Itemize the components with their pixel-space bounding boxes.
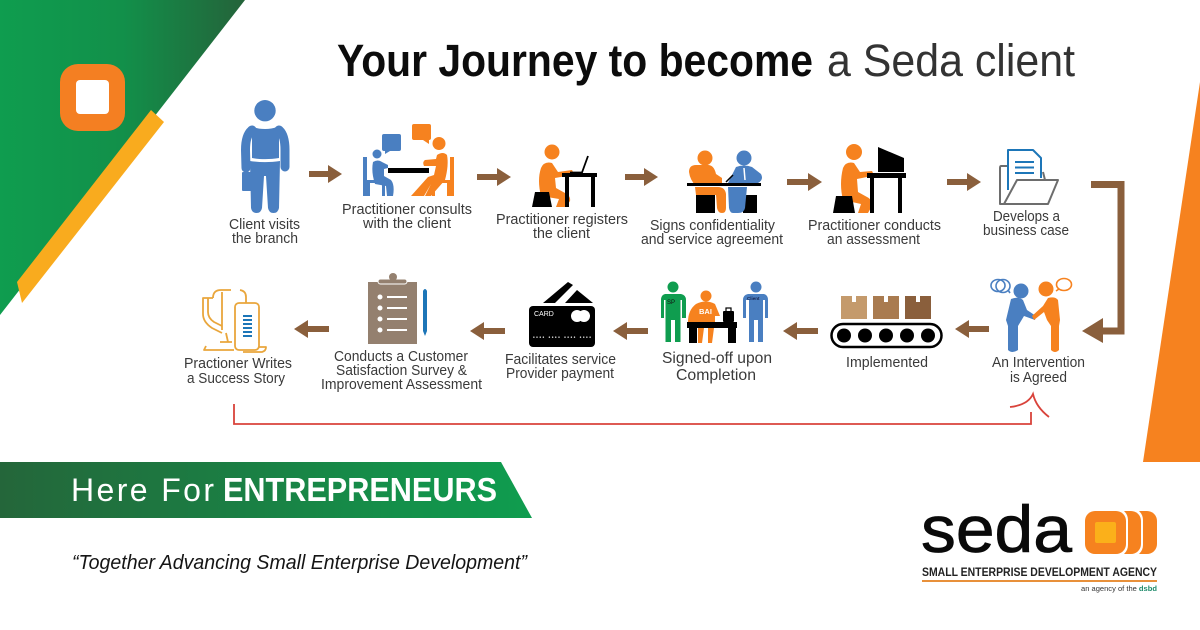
- icon: consultation: [363, 124, 454, 196]
- step: practitioner consults: [342, 124, 472, 232]
- arrow: [787, 173, 822, 191]
- arrow: [294, 320, 329, 338]
- icon: SP, BAI and client sign-off: BAI: [699, 307, 712, 316]
- label: with the client: [362, 216, 451, 232]
- arrow: [470, 322, 505, 340]
- icon: practitioner at computer: [833, 144, 906, 213]
- label: [662, 350, 772, 384]
- label: the branch: [232, 231, 298, 247]
- label: Facilitates service: [505, 352, 616, 368]
- wordmark: seda: [921, 492, 1072, 566]
- green corner triangle: [0, 0, 245, 315]
- title: a Seda client: [827, 35, 1075, 86]
- label: Signed-off upon: [662, 350, 772, 367]
- orange right triangle: [1143, 82, 1200, 462]
- label: Conducts a Customer: [334, 349, 468, 365]
- icon: credit card: CARD: [534, 311, 554, 318]
- label: an assessment: [827, 232, 920, 248]
- icon: handshake: [991, 278, 1072, 352]
- label: Client visits: [229, 217, 300, 233]
- icon: orange seda square: [60, 64, 125, 131]
- banner: here for entrepreneurs: ENTREPRENEURS: [223, 471, 497, 508]
- arrow: connector to second row: [1082, 181, 1124, 343]
- label: is Agreed: [1010, 370, 1067, 386]
- label: An Intervention: [992, 355, 1085, 371]
- arrow: [625, 168, 658, 186]
- icon: folder with document: [1000, 150, 1058, 204]
- label: [184, 356, 292, 387]
- label: [641, 218, 783, 248]
- label: [983, 209, 1069, 239]
- step: develops a business case: [983, 150, 1069, 239]
- label: Signs confidentiality: [650, 218, 776, 234]
- banner: here for entrepreneurs: [0, 462, 532, 518]
- label: Implemented: [846, 355, 928, 371]
- step: implemented: [832, 296, 942, 371]
- step: practioner writes a success story: [184, 290, 292, 387]
- arrow: [613, 322, 648, 340]
- icon: credit card: •••• •••• •••• ••••: [533, 335, 591, 341]
- label: [496, 212, 628, 242]
- logo mark: [1085, 508, 1157, 557]
- icon: practitioner at laptop: [532, 144, 597, 207]
- label: Provider payment: [506, 366, 614, 382]
- icon: SP, BAI and client sign-off: [661, 282, 768, 343]
- label: Completion: [676, 367, 756, 384]
- step: client visits the branch: [229, 100, 300, 247]
- label: business case: [983, 223, 1069, 239]
- arrow: red feedback loop: [234, 394, 1049, 424]
- agency note: an agency of the dsbd: [1081, 584, 1157, 593]
- agency name: SMALL ENTERPRISE DEVELOPMENT AGENCY: [922, 567, 1157, 579]
- arrow: [783, 322, 818, 340]
- step: practitioner registers: [496, 144, 628, 242]
- icon: two people signing at a table: [687, 150, 762, 213]
- label: Develops a: [993, 209, 1061, 225]
- label: Practitioner consults: [342, 202, 472, 218]
- step: facilitates service provider payment: [505, 282, 616, 382]
- seda logo: [921, 492, 1157, 593]
- yellow diagonal band: [17, 110, 164, 303]
- step: signs agreement: [641, 150, 783, 248]
- step: practitioner conducts assessment: [808, 144, 941, 248]
- label: [342, 202, 472, 232]
- arrow: [477, 168, 511, 186]
- step: an intervention is agreed: [991, 278, 1085, 386]
- icon: clipboard and pen: [368, 273, 427, 344]
- label: [992, 355, 1085, 386]
- tagline: “Together Advancing Small Enterprise Development”: [72, 552, 528, 574]
- arrow: [947, 173, 981, 191]
- label: Practioner Writes: [184, 356, 292, 372]
- label: [808, 218, 941, 248]
- icon: credit card: [529, 282, 595, 347]
- icon: SP, BAI and client sign-off: SP: [667, 300, 675, 306]
- label: Satisfaction Survey &: [336, 363, 467, 379]
- arrow: [955, 320, 989, 338]
- label: and service agreement: [641, 232, 783, 248]
- arrow: [309, 165, 342, 183]
- label: Improvement Assessment: [321, 377, 482, 393]
- label: a Success Story: [187, 371, 286, 387]
- label: Practitioner conducts: [808, 218, 941, 234]
- step: customer satisfaction survey: [321, 273, 482, 393]
- icon: conveyor with boxes: [832, 296, 942, 347]
- icon: SP, BAI and client sign-off: Client: [747, 296, 760, 301]
- label: [505, 352, 616, 382]
- label: [321, 349, 482, 393]
- label: [229, 217, 300, 247]
- icon: trophy and document: [203, 290, 266, 352]
- label: Practitioner registers: [496, 212, 628, 228]
- banner: here for entrepreneurs: Here For: [71, 472, 214, 508]
- label: the client: [533, 226, 590, 242]
- step: signed-off upon completion: [661, 282, 772, 384]
- title: Your Journey to become: [337, 35, 813, 86]
- icon: client with briefcase: [242, 100, 285, 213]
